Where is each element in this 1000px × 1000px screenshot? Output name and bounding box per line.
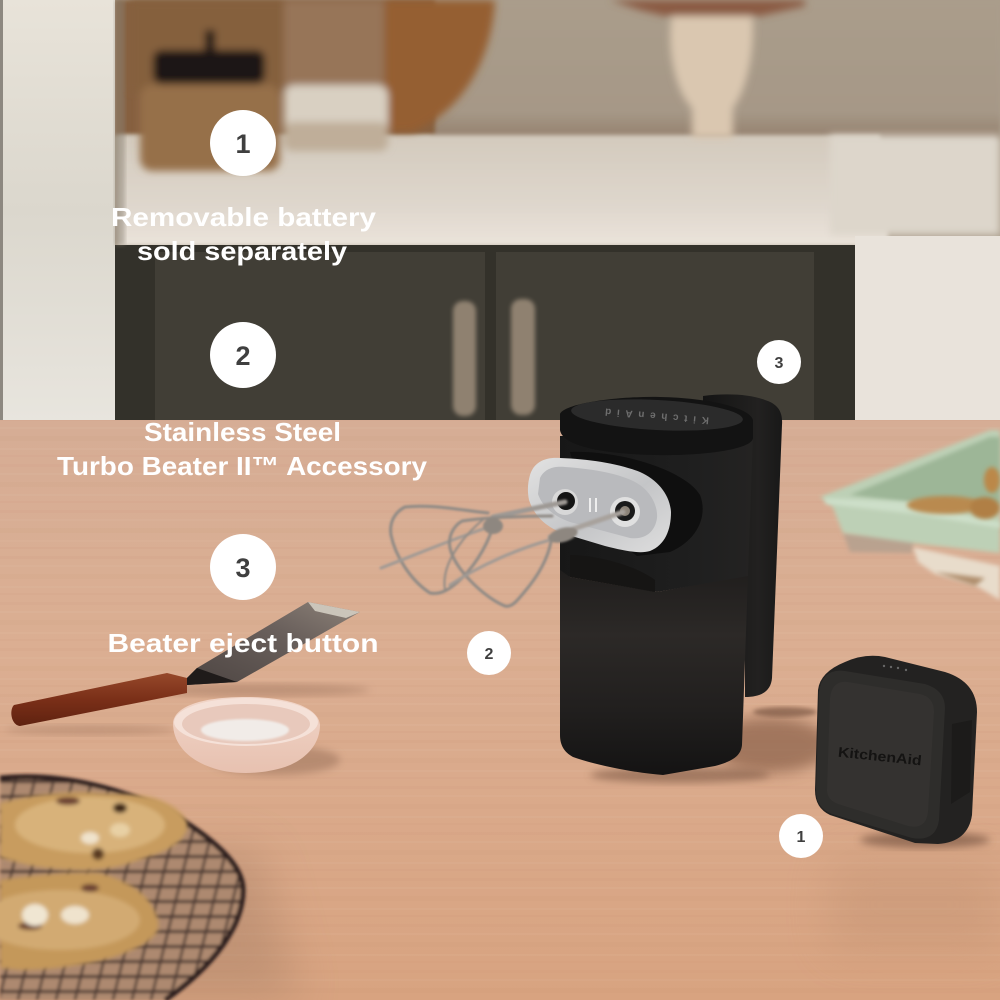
mixer handle (703, 394, 782, 697)
cabinet handles (453, 299, 535, 416)
icon: beaters (381, 502, 623, 606)
label 1: sold separately (137, 236, 348, 266)
marker 1 on battery (779, 814, 823, 858)
label 2: Stainless Steel (144, 417, 341, 447)
mixer top cap (560, 397, 753, 455)
marker 2 on beaters (467, 631, 511, 675)
icon: hand mixer (528, 394, 782, 775)
badge 2: 2 (235, 341, 251, 371)
table top (0, 420, 1000, 1000)
battery logo: KitchenAid (837, 744, 923, 768)
callout: feature 1 (111, 110, 377, 266)
spatula (5, 602, 370, 735)
badge 3: 3 (235, 553, 251, 583)
label 2 (57, 417, 428, 481)
mixer upper body (560, 436, 753, 592)
label 3: Beater eject button (108, 628, 378, 658)
badge 3 (210, 534, 276, 600)
mixer lower body (560, 560, 748, 775)
salt dish (173, 697, 340, 775)
marker 3 on mixer handle: 3 (775, 355, 784, 372)
baking tray with cookies (820, 430, 1000, 600)
badge 1: 1 (235, 129, 251, 159)
marker 3 on mixer handle (757, 340, 801, 384)
background objects: jars, board and vase (130, 0, 805, 171)
label 1: Removable battery (111, 202, 377, 232)
label 2: Turbo Beater II™ Accessory (57, 451, 428, 481)
background: kitchen wall and counter (0, 0, 1000, 425)
marker 1 on battery: 1 (797, 829, 806, 846)
icon: battery (815, 656, 990, 848)
mixer logo: KitchenAid (605, 405, 709, 426)
badge 2 (210, 322, 276, 388)
lower panel top (570, 555, 655, 592)
mixer shadow (590, 707, 830, 783)
callout: feature 3 (108, 534, 378, 658)
beater socket dark surround (570, 452, 703, 556)
cooling rack with cookies (0, 772, 245, 1000)
badge 1 (210, 110, 276, 176)
marker 2 on beaters: 2 (485, 646, 494, 663)
label 1 (111, 202, 377, 266)
callout: feature 2 (57, 322, 428, 481)
beater plate (528, 458, 671, 552)
